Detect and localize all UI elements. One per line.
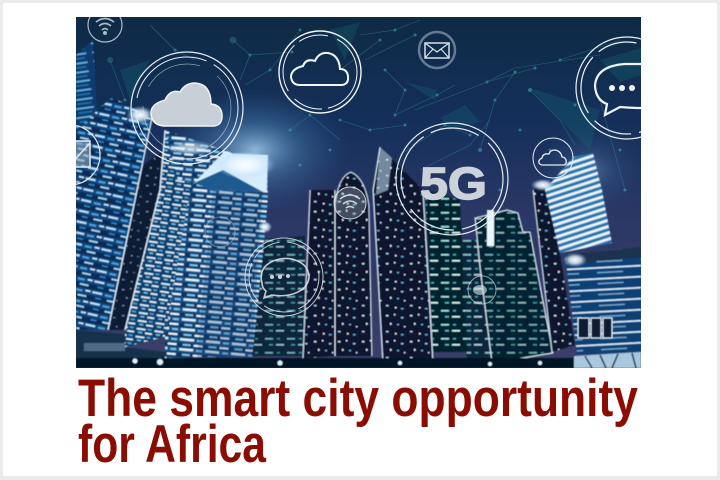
icon: small cloud in circle: [533, 138, 573, 178]
front tower: [165, 183, 213, 359]
ground line: [76, 358, 641, 368]
tower B4: [303, 190, 335, 358]
front tower bright roof: [194, 153, 268, 192]
icon: large cloud in circle: [131, 52, 243, 164]
middle slanted tower: [125, 130, 232, 347]
icon: faint search ring on front tower: [205, 217, 235, 247]
striped lower right block: [565, 247, 641, 355]
icon: chat circle: [245, 238, 323, 316]
bright highlights on building corners: [126, 106, 275, 233]
round-top central tower: [335, 172, 372, 356]
icon: chat bubble right: [576, 37, 678, 139]
teal tower: [425, 190, 467, 352]
striped upper right tower: [545, 153, 612, 253]
left spire tower: [76, 40, 112, 330]
dark tower strip: [108, 140, 178, 330]
tall tower B6: [373, 147, 433, 365]
left podium: [76, 330, 165, 368]
icon: mail: [419, 32, 455, 68]
skyline of buildings: [76, 40, 641, 368]
skyscraper with stepped roof: [475, 210, 553, 363]
back tower: chat building: [252, 236, 305, 356]
icon: outlined cloud in circle: [279, 31, 361, 113]
network plexus lines and nodes: [107, 20, 641, 192]
icon: envelope left edge: [40, 125, 100, 185]
night sky background: [76, 17, 641, 368]
sky glow behind towers: [160, 88, 645, 215]
dark tower right: [533, 180, 575, 352]
icon: faint wifi over skyscraper: [468, 276, 496, 304]
icon: 5G in circle: 5G: [420, 158, 487, 209]
hero image: smart city skyline at night: [76, 17, 641, 368]
icon: wifi on central tower: [334, 187, 366, 219]
icon: 5G in circle: [396, 123, 508, 235]
left main tower: [76, 97, 152, 330]
low teal tower: [462, 240, 492, 360]
icon: wifi top left: [88, 8, 122, 42]
title: [78, 370, 638, 470]
bright reflection on block corner: [563, 253, 587, 267]
